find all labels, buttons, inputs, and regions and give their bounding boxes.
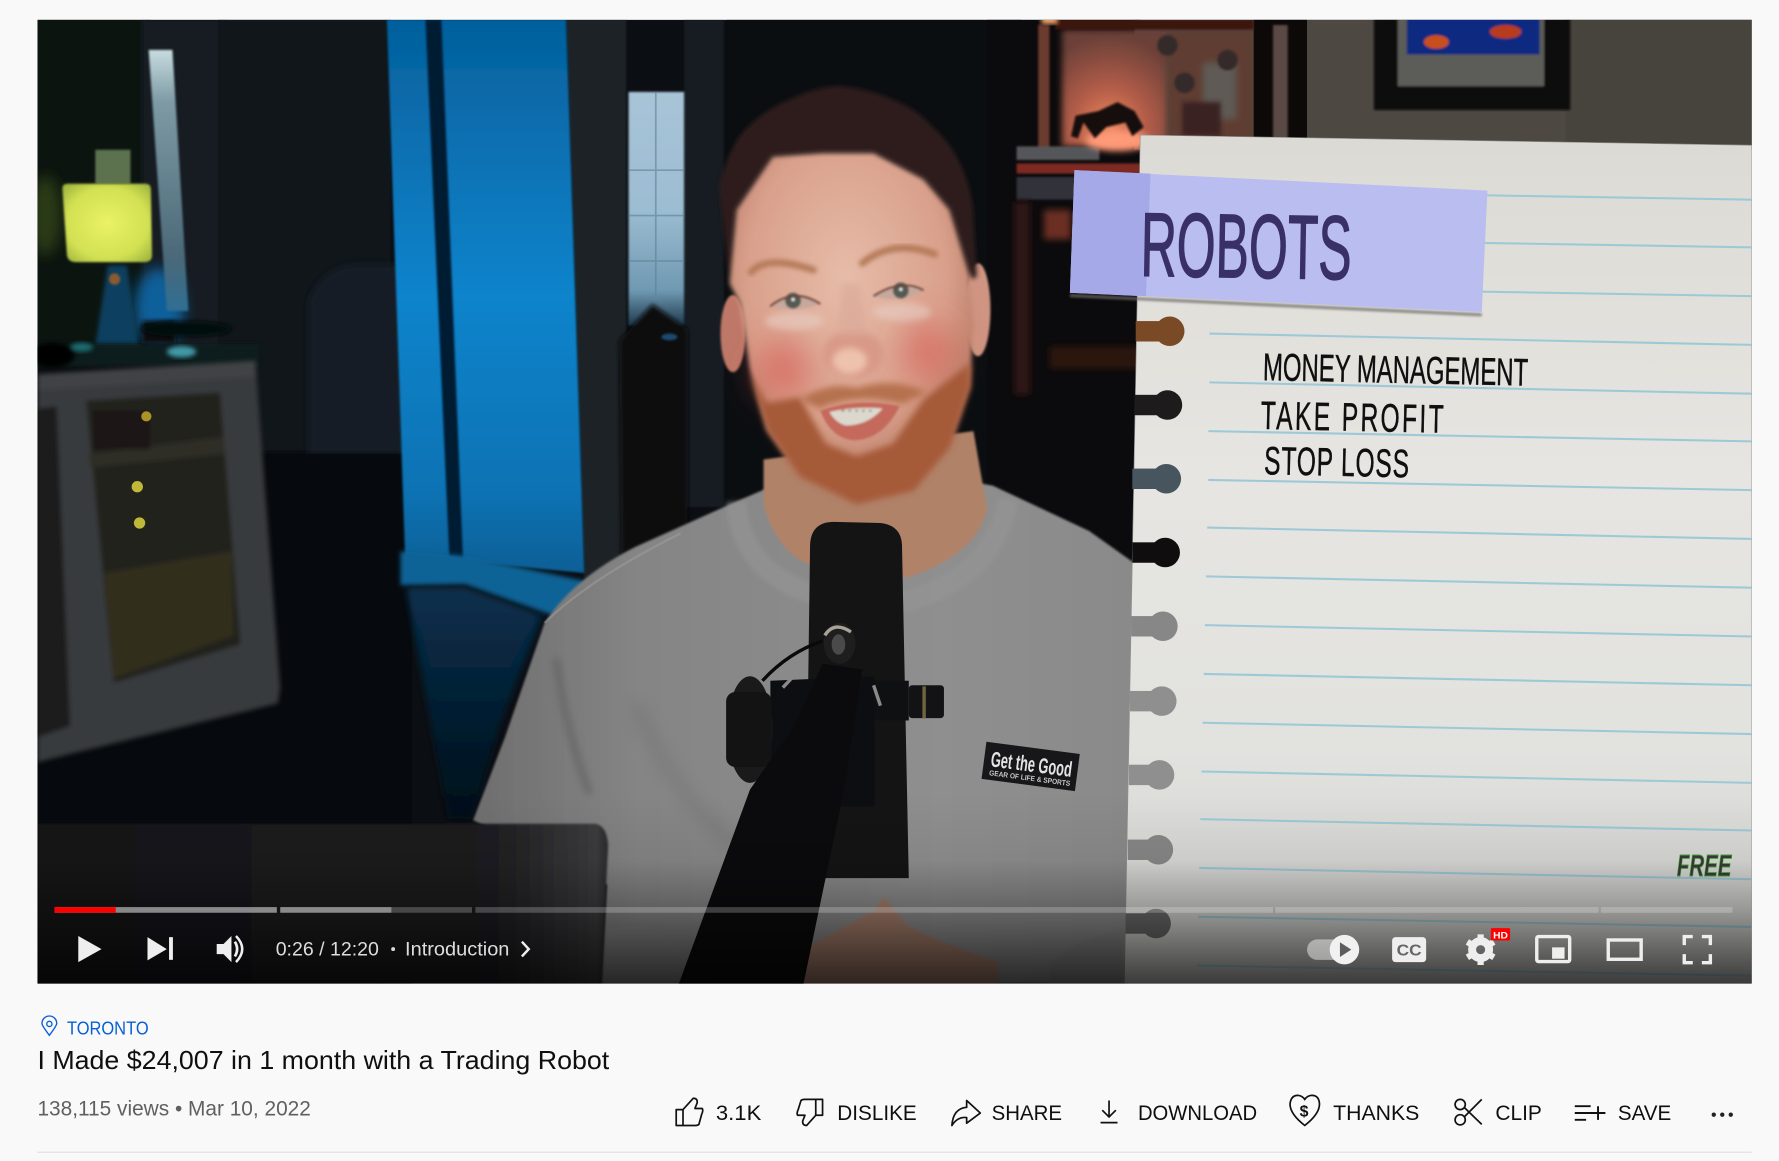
hole 4 <box>1132 538 1180 567</box>
button: like <box>676 1098 761 1125</box>
under-eye highlights <box>765 303 931 330</box>
icon: autoplay toggle <box>1307 935 1359 964</box>
icon: theater mode <box>1608 940 1641 959</box>
binder holes <box>1125 317 1184 938</box>
icon: settings gear <box>1467 934 1494 965</box>
separator dot <box>391 947 395 951</box>
icon: chevron <box>522 942 529 956</box>
button: thanks: $ <box>1300 1103 1309 1120</box>
sweater logo patch <box>982 742 1080 791</box>
hd badge: HD <box>1493 930 1508 941</box>
button: clip <box>1455 1099 1542 1125</box>
hole 1 <box>1136 317 1184 346</box>
hole 7 <box>1129 760 1174 790</box>
button: share <box>952 1101 1062 1125</box>
eyes <box>770 283 924 309</box>
list item: stop loss: STOP LOSS <box>1264 438 1410 486</box>
hole 5 <box>1131 612 1178 641</box>
player gradient <box>37 794 1752 984</box>
laptop <box>37 824 608 984</box>
hole 9 <box>1125 909 1171 938</box>
nose <box>823 284 884 378</box>
table lamp <box>29 150 152 346</box>
cheeks <box>756 320 955 398</box>
button: save <box>1575 1102 1671 1125</box>
icon: fullscreen <box>1684 937 1710 963</box>
shelves and orange wall <box>1014 17 1307 395</box>
video title: I Made $24,007 in 1 month with a Trading Robot <box>37 1045 610 1075</box>
table top objects <box>29 321 259 368</box>
hd badge <box>1491 928 1510 941</box>
hair <box>719 86 977 286</box>
list item: money management: MONEY MANAGEMENT <box>1263 345 1529 394</box>
sleeve cuffs <box>605 983 1122 984</box>
button: share: SHARE <box>992 1102 1062 1125</box>
person <box>473 86 1140 984</box>
cabinet lights <box>132 411 151 529</box>
icon: closed captions <box>1392 937 1426 962</box>
action buttons row <box>676 1095 1733 1125</box>
ruled lines <box>1197 195 1752 976</box>
free watermark: FREE <box>1677 849 1732 883</box>
button: more <box>1712 1113 1733 1117</box>
right controls <box>1307 928 1710 965</box>
beard <box>750 363 970 504</box>
hole 3 <box>1132 464 1181 494</box>
left controls <box>78 936 529 962</box>
heading: robots: ROBOTS <box>1140 194 1353 299</box>
button: thanks: THANKS <box>1333 1102 1419 1125</box>
eyebrows <box>751 248 935 272</box>
list item: take profit: TAKE PROFIT <box>1260 393 1444 441</box>
button: clip: CLIP <box>1495 1102 1542 1125</box>
hole 2 <box>1135 390 1182 420</box>
button: dislike: DISLIKE <box>837 1102 917 1125</box>
microphone <box>726 522 944 878</box>
sweater logo patch: Get the Good <box>989 746 1074 782</box>
ears <box>720 263 990 372</box>
face <box>730 153 973 504</box>
icon: map pin <box>42 1016 57 1035</box>
icon: closed captions: CC <box>1397 942 1422 959</box>
window left <box>149 50 188 311</box>
time display: 0:26 / 12:20 <box>276 938 379 960</box>
button: thanks <box>1290 1095 1419 1125</box>
button: save: SAVE <box>1618 1102 1671 1125</box>
moustache <box>800 383 927 408</box>
location name: TORONTO <box>67 1019 149 1039</box>
icon: volume <box>217 936 242 962</box>
notebook page <box>1124 135 1752 984</box>
icon: next <box>147 937 173 960</box>
framed picture <box>1374 16 1570 110</box>
progress bar <box>54 907 1732 913</box>
window centre <box>619 92 688 590</box>
button: like: 3.1K <box>716 1102 761 1125</box>
neck <box>764 431 987 577</box>
sticky note <box>1070 170 1487 317</box>
location tag <box>42 1016 149 1039</box>
blue column <box>387 19 584 819</box>
icon: miniplayer <box>1537 937 1570 962</box>
sweater logo patch: GEAR OF LIFE & SPORTS <box>989 768 1071 788</box>
chapter title: Introduction <box>405 938 509 960</box>
mouth <box>820 403 900 440</box>
button: dislike <box>797 1099 917 1125</box>
divider <box>37 1152 1752 1153</box>
view count and date: 138,115 views • Mar 10, 2022 <box>37 1097 311 1120</box>
icon: play <box>78 936 102 962</box>
hole 6 <box>1130 686 1177 716</box>
button: download: DOWNLOAD <box>1138 1102 1257 1125</box>
notebook list text <box>1260 345 1529 486</box>
display cabinet <box>37 361 280 762</box>
sweater <box>473 477 1140 984</box>
hole 8 <box>1128 835 1173 865</box>
hands <box>794 896 998 984</box>
boom arm <box>678 664 862 985</box>
